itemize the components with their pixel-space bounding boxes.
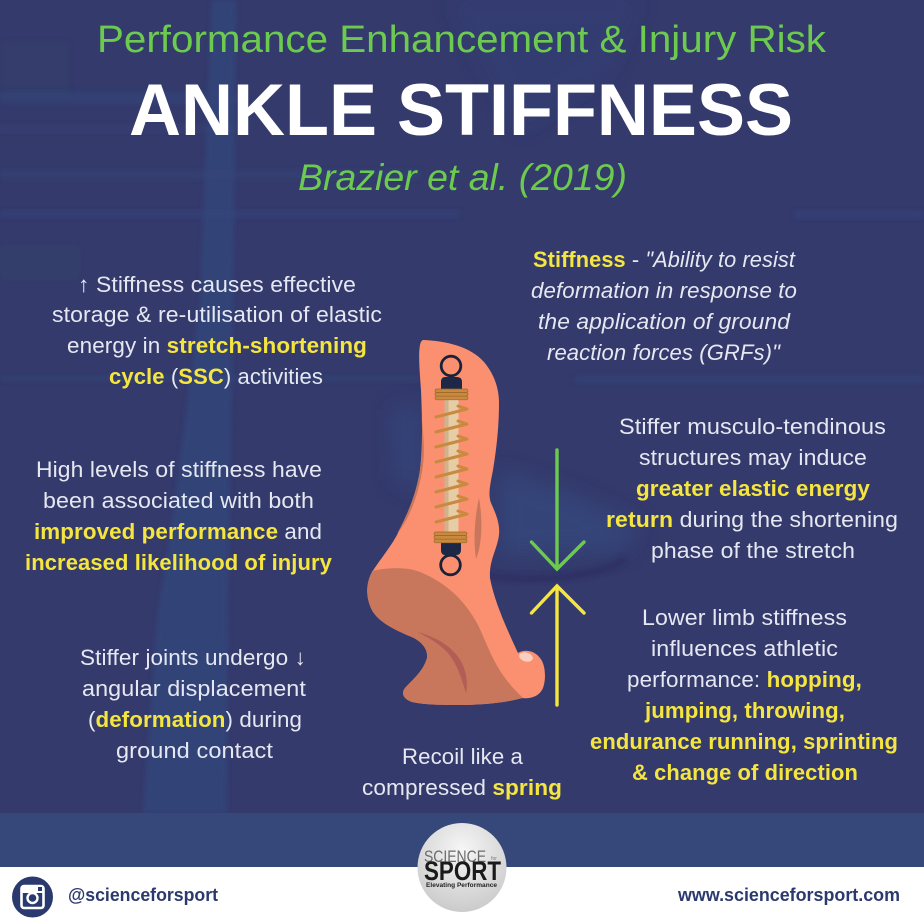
foot illustration bbox=[367, 340, 545, 705]
text block: angular displacement: angular displacement bbox=[82, 676, 306, 701]
arrow: yellow upward bbox=[532, 586, 584, 705]
text block: angular displacement: (deformation) during bbox=[88, 707, 302, 732]
arch crease bbox=[417, 632, 467, 693]
top ring bbox=[441, 356, 461, 376]
logo badge bbox=[418, 823, 506, 912]
instagram handle: @scienceforsport bbox=[68, 885, 218, 905]
text block: athletic performance: & change of direction bbox=[632, 760, 858, 785]
bottom collar bbox=[434, 532, 467, 543]
logo tagline: Elevating Performance bbox=[426, 883, 498, 889]
text block: spring recoil bbox=[362, 744, 562, 800]
text block: SSC energy storage bbox=[52, 272, 382, 389]
text block: performance and injury bbox=[25, 457, 333, 575]
text block: stiffness definition: the application of ground bbox=[538, 309, 791, 334]
text block: angular displacement: Stiffer joints undergo ↓ bbox=[80, 645, 306, 670]
icon: instagram bbox=[12, 876, 53, 918]
bottom band bbox=[0, 813, 924, 869]
text block: elastic energy return: phase of the stretch bbox=[651, 538, 855, 563]
bottom cap bbox=[441, 540, 461, 555]
citation: Brazier et al. (2019) bbox=[298, 157, 627, 198]
arrow: green downward bbox=[532, 450, 584, 569]
text block: athletic performance: jumping, throwing, bbox=[644, 698, 845, 723]
text block: performance and injury: increased likelihood of injury bbox=[25, 550, 333, 575]
foot silhouette bbox=[367, 340, 545, 705]
text block: stiffness definition: deformation in response to bbox=[531, 278, 797, 303]
text block: performance and injury: improved performance and bbox=[34, 519, 322, 544]
text block: spring recoil: Recoil like a bbox=[402, 744, 524, 769]
spring bbox=[434, 356, 468, 575]
text block: angular displacement bbox=[80, 645, 306, 763]
text block: stiffness definition: Stiffness - "Ability to resist bbox=[533, 247, 796, 272]
logo word: sport: SPORT bbox=[424, 856, 501, 886]
text block: athletic performance bbox=[590, 605, 898, 785]
calf edge shading bbox=[397, 420, 424, 534]
text block: angular displacement: ground contact bbox=[116, 738, 273, 763]
text block: performance and injury: High levels of stiffness have bbox=[36, 457, 322, 482]
top cap bbox=[441, 377, 462, 392]
text block: stiffness definition bbox=[531, 247, 797, 365]
text block: SSC energy storage: energy in stretch-shortening bbox=[67, 333, 367, 358]
text block: stiffness definition: reaction forces (GRFs)" bbox=[547, 340, 781, 365]
footer bbox=[0, 867, 924, 924]
text block: elastic energy return: greater elastic energy bbox=[636, 476, 871, 501]
text block: elastic energy return: Stiffer musculo-tendinous bbox=[619, 414, 886, 439]
logo word: for: for bbox=[491, 856, 497, 862]
text block: athletic performance: endurance running, sprinting bbox=[590, 729, 898, 754]
text block: SSC energy storage: storage & re-utilisation of elastic bbox=[52, 302, 382, 327]
heel shading bbox=[367, 568, 523, 705]
bottom ring bbox=[441, 555, 460, 575]
title block bbox=[97, 19, 827, 198]
rod bbox=[444, 398, 458, 533]
website: www.scienceforsport.com bbox=[677, 885, 900, 905]
logo word: science: SCIENCE bbox=[424, 847, 486, 866]
text block: elastic energy return: return during the shortening bbox=[606, 507, 898, 532]
toenail bbox=[518, 651, 534, 663]
text block: athletic performance: influences athletic bbox=[651, 636, 838, 661]
text block: elastic energy return bbox=[606, 414, 898, 563]
tendon crease bbox=[475, 498, 481, 559]
text block: athletic performance: Lower limb stiffness bbox=[642, 605, 847, 630]
main title: ANKLE STIFFNESS bbox=[129, 70, 793, 151]
text block: athletic performance: performance: hopping, bbox=[627, 667, 862, 692]
top collar bbox=[435, 389, 468, 400]
text block: spring recoil: compressed spring bbox=[362, 775, 562, 800]
text block: performance and injury: been associated with both bbox=[43, 488, 314, 513]
text block: SSC energy storage: ↑ Stiffness causes effective bbox=[78, 272, 356, 297]
subtitle: Performance Enhancement & Injury Risk bbox=[97, 19, 827, 61]
text block: elastic energy return: structures may induce bbox=[639, 445, 867, 470]
coils bbox=[436, 406, 467, 522]
text block: SSC energy storage: cycle (SSC) activities bbox=[109, 364, 323, 389]
